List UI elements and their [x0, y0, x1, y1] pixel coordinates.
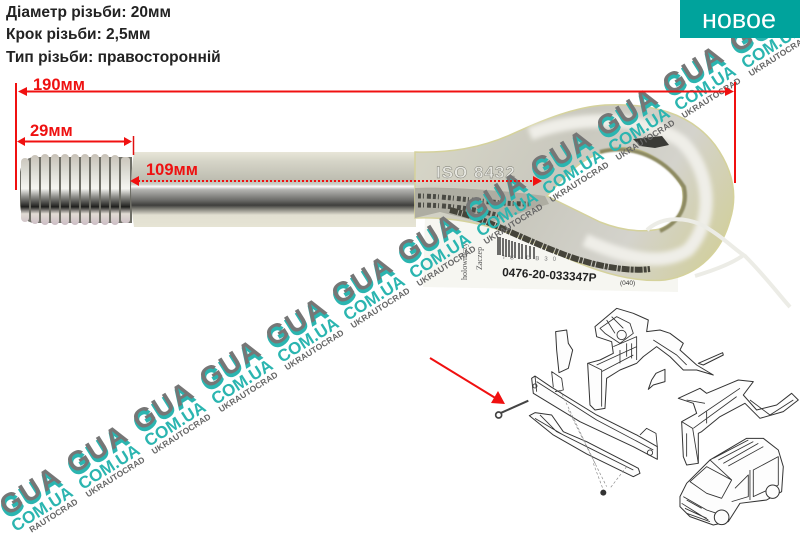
part label sticker	[423, 215, 678, 292]
part label sticker: Zaczep	[475, 247, 484, 270]
bumper beam	[532, 376, 657, 459]
top specification text: Крок різьби: 2,5мм	[6, 26, 151, 43]
right rail	[678, 380, 798, 465]
watermark band: UKRAUTOCRAD	[614, 117, 677, 162]
watermark band: GUA	[392, 206, 465, 268]
eye neck	[415, 188, 549, 222]
watermark band: COM.UA	[208, 356, 276, 408]
watermark band: UKRAUTOCRAD	[680, 75, 743, 120]
watermark band: UKRAUTOCRAD	[548, 159, 611, 204]
lower absorber	[529, 413, 640, 477]
small tow eye	[496, 401, 528, 418]
shaft	[131, 152, 416, 227]
embossed mark: ISO 8432	[436, 163, 516, 182]
van	[680, 438, 783, 525]
dimension: 190 mm: 190мм	[33, 76, 85, 94]
badge: new	[680, 0, 800, 38]
mounting plate	[556, 330, 573, 373]
dimension: 29 mm: 29мм	[30, 122, 73, 140]
dimension: 190 mm	[16, 76, 735, 190]
watermark band: UKRAUTOCRAD	[150, 411, 213, 456]
watermark band: UKRAUTOCRAD	[283, 327, 346, 372]
watermark band: GUA	[658, 42, 731, 103]
watermark band: COM.UA	[75, 441, 143, 493]
exploded parts diagram	[496, 308, 798, 525]
watermark band: GUA	[261, 294, 334, 355]
watermark band: COM.UA	[605, 104, 673, 156]
inner rim shading	[600, 150, 685, 231]
watermark band: GUA	[127, 374, 200, 436]
dark speckled edge	[450, 210, 650, 270]
top specification text	[6, 4, 221, 66]
watermark band: GUA	[525, 122, 598, 184]
threaded end	[20, 154, 132, 225]
red pointer arrow	[430, 358, 505, 404]
part label sticker: 0476-20-033347P	[502, 265, 597, 285]
watermark band: GUA	[725, 0, 798, 61]
small bracket	[648, 369, 665, 389]
watermark band: GUA	[62, 421, 135, 482]
watermark band: GUA	[326, 248, 399, 310]
watermark band: UKRAUTOCRAD	[217, 369, 280, 414]
watermark band: GUA	[592, 84, 665, 145]
watermark band: UKRAUTOCRAD	[84, 454, 147, 499]
dimension: 29 mm	[17, 122, 134, 155]
watermark band: COM.UA	[274, 314, 342, 366]
watermark band: GUA	[526, 126, 599, 187]
watermark band: COM.UA	[141, 398, 209, 450]
watermark band: COM.UA	[473, 188, 541, 240]
tow eye bolt	[20, 105, 790, 307]
watermark band: COM.UA	[539, 146, 607, 198]
watermark band: UKRAUTOCRAD	[349, 285, 412, 330]
loop highlight	[530, 121, 706, 259]
watermark band: COM.UA	[340, 272, 408, 324]
part label sticker: holowniczy	[460, 243, 469, 280]
top specification text: Тип різьби: правосторонній	[6, 49, 221, 66]
watermark band: UKRAUTOCRAD	[415, 243, 478, 288]
dimension: 109 mm	[130, 161, 542, 186]
watermark band: GUA	[657, 38, 730, 100]
arm end	[698, 353, 723, 365]
watermark band: GUA	[260, 290, 333, 352]
speckled neck	[418, 196, 530, 216]
fixing bolt	[600, 490, 606, 496]
cable tie	[647, 219, 790, 307]
part label sticker: (040)	[620, 280, 635, 287]
watermark band: COM.UA	[671, 62, 739, 114]
watermark band: GUA	[327, 252, 400, 313]
watermark band: GUA	[128, 378, 201, 439]
watermark band: GUA	[194, 332, 267, 394]
watermark band: GUA	[195, 336, 268, 397]
badge: new: новое	[702, 4, 776, 34]
dark spot	[633, 136, 669, 148]
watermark band: GUA	[393, 210, 466, 271]
dimension: 109 mm: 109мм	[146, 161, 198, 179]
watermark band: GUA	[591, 80, 664, 142]
watermark band: GUA	[61, 417, 134, 479]
part label sticker: IC-DB30	[503, 255, 561, 263]
upper front rail	[588, 308, 713, 410]
watermark band: UKRAUTOCRAD	[482, 201, 545, 246]
watermark band: GUA	[460, 168, 533, 229]
eye loop	[415, 105, 734, 280]
dashed guides	[560, 390, 627, 490]
top specification text: Діаметр різьби: 20мм	[6, 4, 171, 21]
watermark band: COM.UA	[406, 230, 474, 282]
watermark band: GUA	[459, 164, 532, 226]
